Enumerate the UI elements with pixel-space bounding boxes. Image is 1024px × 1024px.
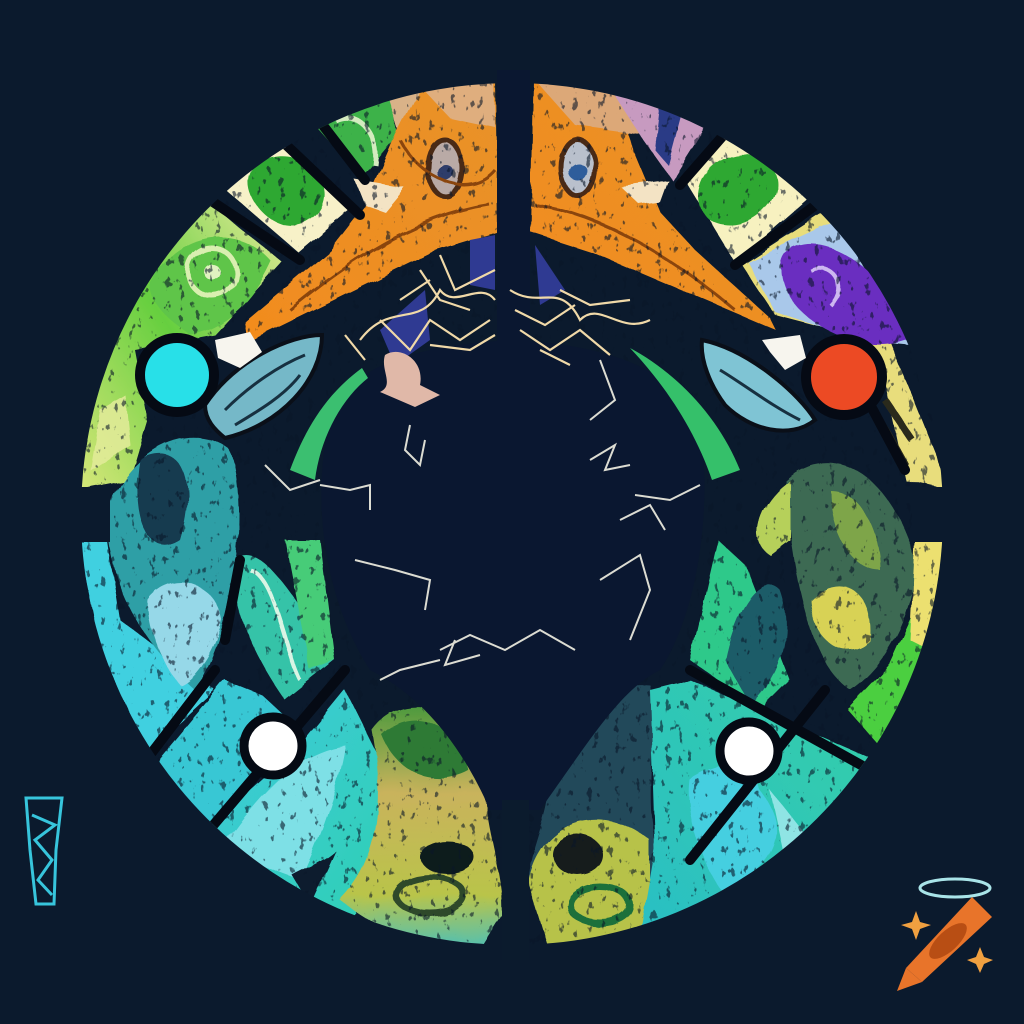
right leaf shield xyxy=(702,340,815,431)
panel: white tile with green glyph xyxy=(226,147,348,252)
dark lattice lines xyxy=(150,115,905,860)
lace pattern top left xyxy=(345,255,495,360)
panel: right mosaic yellow and green xyxy=(757,463,945,752)
crest near top centre xyxy=(380,352,440,407)
network lines centre xyxy=(265,360,700,680)
left white tab xyxy=(215,332,262,368)
panel: white tile with green glyph, right xyxy=(685,128,812,262)
right red circle marker xyxy=(806,339,882,415)
left green crescent xyxy=(290,368,368,480)
small cyan ellipse above logo xyxy=(920,879,990,897)
central vertical gap xyxy=(497,70,530,370)
speckle texture xyxy=(80,80,944,952)
right white tab xyxy=(762,335,806,370)
lower left white dot xyxy=(244,717,302,775)
left cyan circle marker xyxy=(140,338,214,412)
panel: top green tile xyxy=(318,93,420,172)
panel: bottom right yellow green swirl xyxy=(528,685,660,952)
bottom left cyan squiggle xyxy=(26,798,62,904)
panel: bottom left yellow green swirl xyxy=(340,707,502,958)
side gaps xyxy=(70,487,952,542)
circular stained-glass wheel xyxy=(78,80,950,958)
panel: lower right teal band xyxy=(640,540,875,935)
panel: colour tiles xyxy=(78,80,950,958)
left leaf shield xyxy=(205,335,322,438)
lower right white dot xyxy=(720,722,778,780)
right green crescent xyxy=(630,348,740,480)
panel: right orange creature xyxy=(530,80,776,330)
panel: right violet tile xyxy=(742,205,950,490)
lace pattern top right xyxy=(510,290,650,365)
panel: top left green tile xyxy=(78,196,282,490)
panel: lower left teal xyxy=(78,438,239,752)
blue accent patches xyxy=(380,235,565,365)
panel: left bottom teal band xyxy=(150,540,385,925)
panel: top right purple and blue tile xyxy=(610,88,710,180)
panel: left orange creature xyxy=(245,80,498,342)
central dark field xyxy=(321,340,704,810)
crayon logo xyxy=(897,897,993,991)
